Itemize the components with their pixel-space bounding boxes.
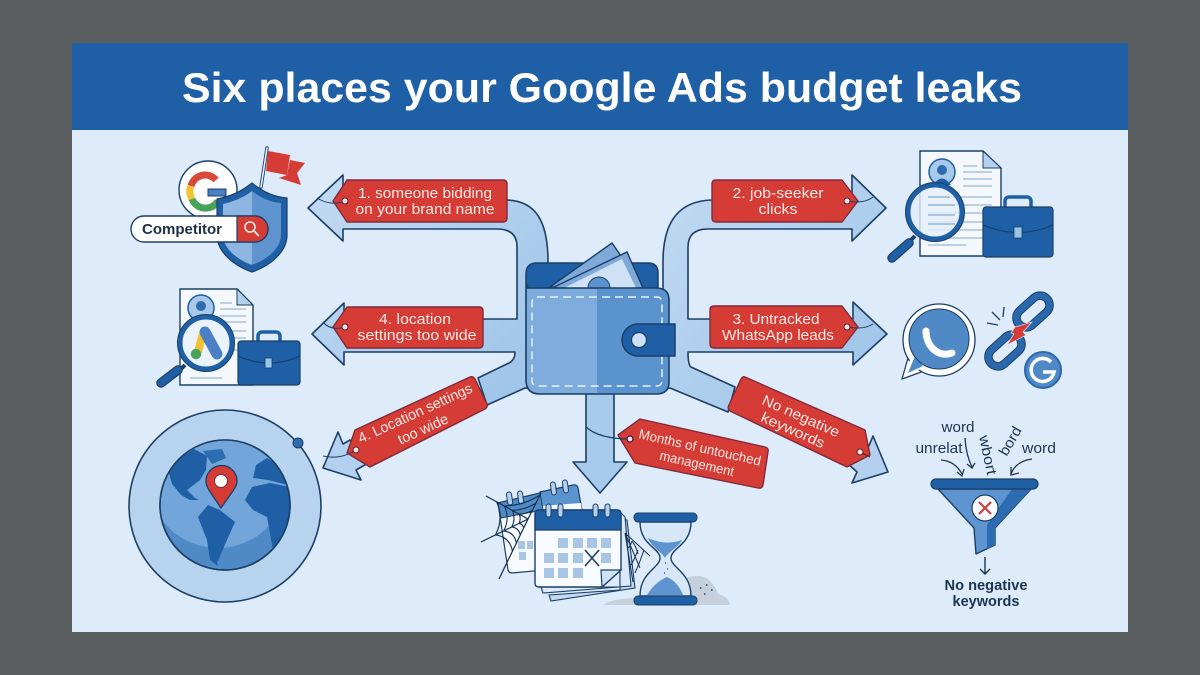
- keyword labels: word: [1021, 441, 1056, 457]
- tag: leak 6 no negative keywords: No negative: [759, 393, 842, 441]
- tag: leak 1: 1. someone bidding: [358, 186, 492, 202]
- tag: leak 5 location settings: too wide: [396, 411, 451, 448]
- tag: leak 1: [317, 180, 507, 222]
- keyword labels: [916, 420, 1056, 476]
- icon: job seeker resume with magnifier and briefcase: [892, 151, 1053, 258]
- tag: leak 1: on your brand name: [356, 202, 494, 218]
- wallet: [526, 243, 675, 394]
- keyword labels: unrelat: [916, 441, 962, 457]
- tag: leak 7 months of untouched management: Months of untouched: [637, 426, 762, 469]
- icon: cobwebbed calendars and hourglass: [481, 480, 730, 605]
- funnel caption: keywords: [952, 594, 1020, 610]
- tag: leak 6 no negative keywords: keywords: [758, 410, 827, 452]
- icon: globe with location pin: [129, 408, 321, 602]
- hourglass: [640, 522, 691, 596]
- icon: competitor bidding on brand: Competitor: [142, 221, 222, 238]
- arrow: down to calendar: [573, 390, 627, 493]
- tag: leak 6 no negative keywords: [728, 377, 870, 467]
- tag: leak 3: 3. Untracked: [732, 312, 820, 328]
- tag: leak 2: clicks: [758, 202, 798, 218]
- icon: keyword funnel: [931, 438, 1038, 574]
- icon: competitor bidding on brand: [131, 148, 305, 272]
- tag: leak 2: [712, 180, 873, 222]
- title: Six places your Google Ads budget leaks: [182, 64, 1022, 111]
- stacked sheets: [549, 518, 635, 601]
- funnel caption: No negative: [944, 578, 1028, 594]
- panel: infographic background: [72, 43, 1128, 632]
- arrows: left branch from wallet to leaks 1, 4 and 5: [308, 175, 548, 405]
- icon: WhatsApp with broken link and Google badge: [902, 292, 1061, 388]
- keyword labels: bord: [996, 424, 1026, 459]
- tag: leak 4: 4. location: [379, 312, 451, 328]
- header band: [72, 43, 1128, 130]
- arrowhead: no negative keywords leak: [846, 436, 888, 483]
- tag: leak 5 location settings: [323, 377, 487, 467]
- tag: leak 7 months of untouched management: management: [658, 448, 736, 479]
- tag: leak 4: settings too wide: [358, 328, 476, 344]
- tag: leak 5 location settings: 4. Location settings: [356, 381, 475, 447]
- tag: leak 3: [710, 306, 873, 348]
- icon: resume with Google Ads magnifier and briefcase: [161, 289, 300, 385]
- back calendars: [540, 485, 582, 512]
- cobweb left: [481, 493, 541, 579]
- tag: leak 3: WhatsApp leads: [722, 328, 834, 344]
- tag: leak 4: [323, 307, 483, 348]
- cobweb right: [625, 533, 650, 582]
- tag: leak 7 months of untouched management: [586, 419, 768, 488]
- keyword labels: wbort: [975, 433, 999, 476]
- arrowhead: lower-left location leak: [323, 432, 370, 480]
- main calendar: [535, 510, 621, 587]
- tag: leak 2: 2. job-seeker: [732, 186, 824, 202]
- funnel caption: [944, 578, 1028, 610]
- keyword labels: word: [940, 420, 974, 436]
- arrows: right branch from wallet to leaks 2, 3 and 6: [660, 175, 887, 412]
